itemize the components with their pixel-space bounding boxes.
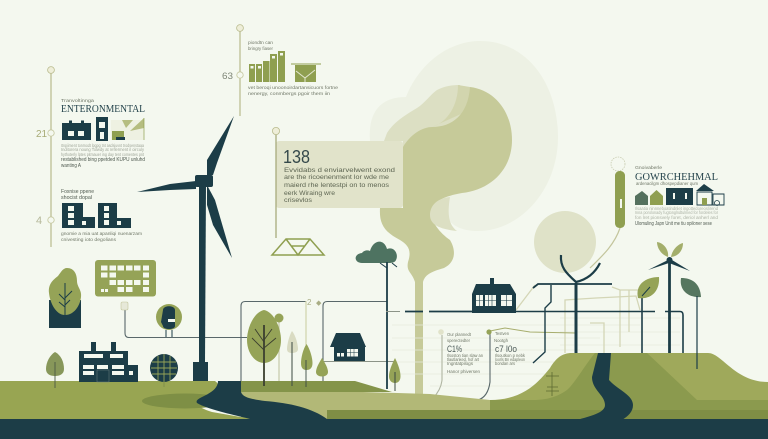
callout: C1 percent: [438, 329, 483, 374]
statistic description: maierd rhe lentestpi on to menos: [284, 182, 390, 189]
icon: small olive tree: [46, 352, 64, 388]
step number 4: 4: [36, 215, 42, 227]
panel: environmental: [36, 67, 145, 247]
secondary caption: Foxnise ppene: [61, 189, 94, 195]
callout: C7 percent: Nootgh: [494, 338, 509, 343]
icon: box: [291, 64, 321, 82]
connector node: [121, 302, 128, 310]
callout: C7 percent: c7 l0o: [495, 344, 517, 354]
panel: central statistic: [272, 127, 403, 238]
statistic description: eerk Wiraing wre: [284, 190, 335, 197]
environmental body text: hythoterly lptes pitmauer ing day tent comentes prit: [61, 152, 145, 157]
large wind turbine: [137, 116, 234, 381]
bars caption: piondtn can: [248, 40, 274, 45]
river and bottom band: [0, 353, 768, 439]
icon: landscape card: [111, 118, 144, 140]
callout: C7 percent: Testven: [495, 331, 510, 336]
connector from pill: [590, 228, 620, 268]
bars description: nenergy, conmbergs pgoir them iin: [248, 91, 331, 96]
connector lines: [125, 302, 490, 400]
bars caption: [248, 40, 274, 51]
statistic number: 138: [283, 147, 310, 167]
icon: factory block: [62, 120, 91, 140]
secondary caption: [61, 189, 94, 201]
callout: C7 percent: [486, 329, 526, 366]
statistic description: [284, 167, 395, 204]
callout: C1 percent: Our plannedt: [447, 332, 472, 337]
icon: person badge: [156, 304, 182, 337]
caption under buildings: [61, 231, 142, 242]
icon: small house: [330, 333, 366, 361]
panel: governmental: [590, 157, 724, 268]
environmental body text: Inditorera noung Tolwdy at reflerment il oirculy: [61, 147, 145, 152]
icon: round grid tree: [150, 354, 178, 387]
environmental heading: Tranvoltinnga: [61, 98, 95, 103]
environmental body text: Itnpiiment tonmodt lpgpg tnt asdsiuvnt trodsenstaaa: [61, 143, 144, 148]
icon: gauge pill: [611, 157, 625, 228]
bar chart: [249, 51, 285, 82]
bars description: vet beroqi unoonoirdartansicuors fortne: [248, 85, 339, 90]
icons: government buildings: [635, 184, 724, 206]
icon: factory building: [79, 342, 138, 382]
tree group: [247, 301, 400, 391]
governmental heading: Gnoivaberle: [635, 165, 663, 170]
bars caption: bringry fiaser: [248, 46, 274, 51]
label: 2 with marker: [307, 298, 322, 307]
hatched ground texture: [392, 318, 680, 386]
small turbine with leaves: [648, 242, 690, 353]
environmental heading: ENTERONMENTAL: [61, 103, 145, 115]
label: 2 with marker: ◆: [316, 300, 322, 307]
pale pipe network: [516, 285, 640, 353]
governmental body text: [635, 206, 719, 227]
panel: energy bars: [222, 25, 339, 116]
icon: truss: [272, 239, 324, 255]
callout: C1 percent: Hanor phiversen: [447, 369, 481, 374]
governmental body text: Ulomuling Japn Unit me tiu opiloner sese: [635, 221, 712, 227]
statistic description: crisevlos: [284, 197, 313, 204]
ground: hills: [0, 353, 768, 419]
icon: keyboard grid panel: [95, 260, 156, 296]
secondary caption: shocist dopal: [61, 195, 92, 201]
callout: C1 percent: tlautlanked, hof art: [447, 357, 480, 362]
callout: C1 percent: Ilsoston tian slaw an: [447, 353, 483, 358]
label: 2 with marker: 2: [307, 298, 312, 307]
icon: leaf tree on dark block: [49, 268, 81, 328]
icon: fence on hill: [546, 372, 559, 396]
caption under buildings: gnomie a mia uat apanliqi nuenarzam: [61, 231, 142, 236]
callout: C1 percent: sperectedter: [447, 338, 471, 343]
caption under buildings: cnivesting ioto degolians: [61, 237, 117, 242]
icon: farmhouse: [472, 278, 516, 313]
governmental body text: Ilsaatia ninnneboatindnlet ingottedoreoslirend: [635, 206, 719, 211]
step number 21: 21: [36, 129, 48, 140]
environmental body text: [61, 143, 145, 169]
governmental body text: fon lret pionsvely foret, deriol anherl and: [635, 215, 719, 220]
statistic description: Evvidabs d enviarvelwent exond: [284, 167, 395, 174]
olive data line: [490, 328, 575, 333]
plant on stem: [637, 277, 659, 353]
governmental heading: [635, 165, 718, 186]
icon: city buildings: [62, 203, 131, 228]
statistic description: are the ricoenenment lor wde me: [284, 174, 389, 181]
callout: C7 percent: loorls Bn edapleon: [495, 357, 525, 362]
step number 63: 63: [222, 71, 233, 81]
environmental body text: restablished bing ppetded KUPU unluhd: [61, 157, 145, 163]
governmental heading: GOWRCHEHMAL: [635, 171, 718, 183]
governmental heading: ardenacilgm dhospepdianer qum: [636, 181, 698, 186]
environmental heading: [61, 98, 145, 115]
icon: tower block: [96, 117, 108, 141]
icon: cloud tree: [356, 242, 397, 389]
callout: C7 percent: bondan ars: [495, 361, 516, 366]
bars description: [248, 85, 339, 96]
environmental body text: wanting A: [61, 163, 82, 169]
callout: C1 percent: Ingntatpilogs: [447, 361, 474, 366]
sun circle: [534, 211, 596, 273]
dark pipe segments: [386, 312, 683, 353]
mid turbine with pipes: [533, 255, 612, 363]
governmental body text: Inna porolonady fugtonglndtulmed for fordeles for: [635, 210, 718, 215]
callout: C1 percent: C1%: [447, 344, 462, 354]
callout: C7 percent: Ilsoutkon p nebk: [495, 353, 526, 358]
dark leaf on stem: [681, 278, 701, 369]
smoke cloud: [370, 41, 558, 395]
